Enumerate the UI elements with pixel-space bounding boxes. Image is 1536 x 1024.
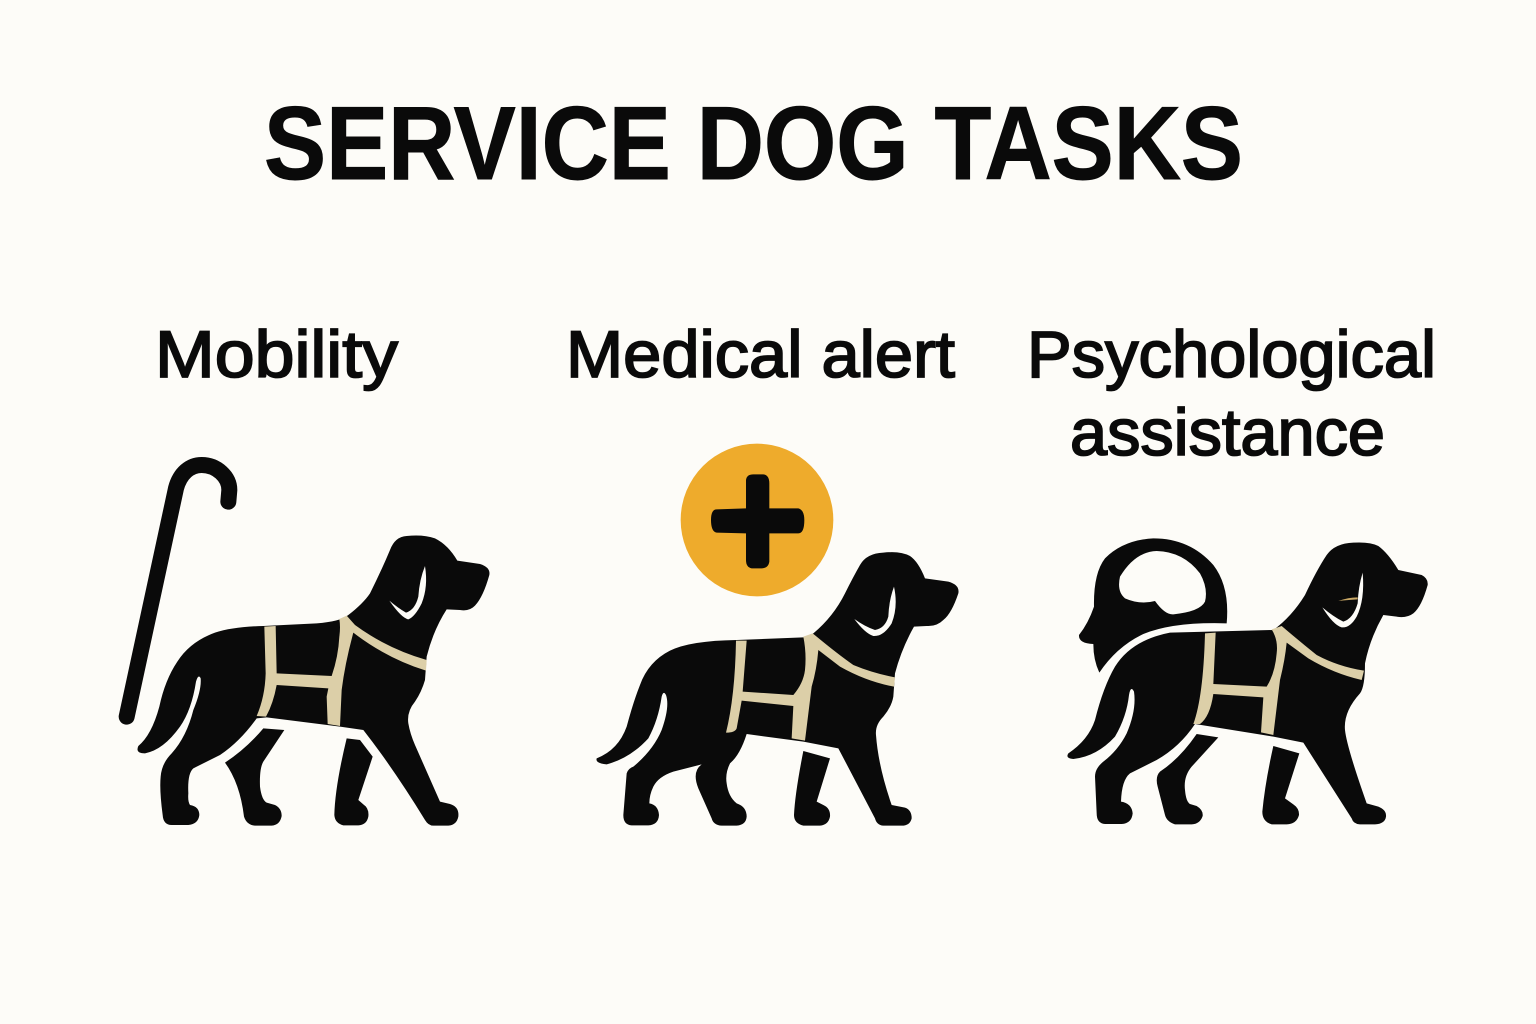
icon: dog far front leg <box>794 751 830 826</box>
icon: eye line <box>1338 597 1358 601</box>
icon: dog far front leg <box>1262 746 1299 824</box>
heading: Mobility: Mobility <box>155 317 398 391</box>
icon: ear highlight <box>1322 573 1363 627</box>
icon: head profile with brain <box>1079 538 1227 673</box>
panel: medical alert dog <box>596 444 959 826</box>
icon: harness <box>257 616 427 726</box>
icon: medical cross <box>711 474 804 568</box>
heading: Medical alert: Medical alert <box>566 317 955 391</box>
icon: harness <box>726 633 895 741</box>
icon: dog body <box>137 536 489 826</box>
icon: orange circle <box>681 444 833 596</box>
title: SERVICE DOG TASKS <box>264 86 1243 202</box>
icon: dog far hind leg <box>225 728 284 826</box>
heading: Psychological assistance: assistance <box>1070 395 1385 469</box>
icon: dog far front leg <box>334 738 373 825</box>
icon: dog far hind leg <box>1157 734 1218 824</box>
heading: Psychological assistance <box>1027 317 1436 469</box>
icon: dog body <box>1067 542 1428 824</box>
icon: dog body <box>596 552 959 826</box>
heading: Psychological assistance: Psychological <box>1027 317 1436 391</box>
panel: psychological assistance dog with head and brain <box>1067 538 1428 824</box>
icon: ear highlight <box>854 587 896 636</box>
icon: harness <box>1193 626 1364 735</box>
panel: mobility dog with cane <box>127 465 489 826</box>
icon: ear highlight <box>389 566 426 619</box>
icon: cane <box>127 465 229 717</box>
